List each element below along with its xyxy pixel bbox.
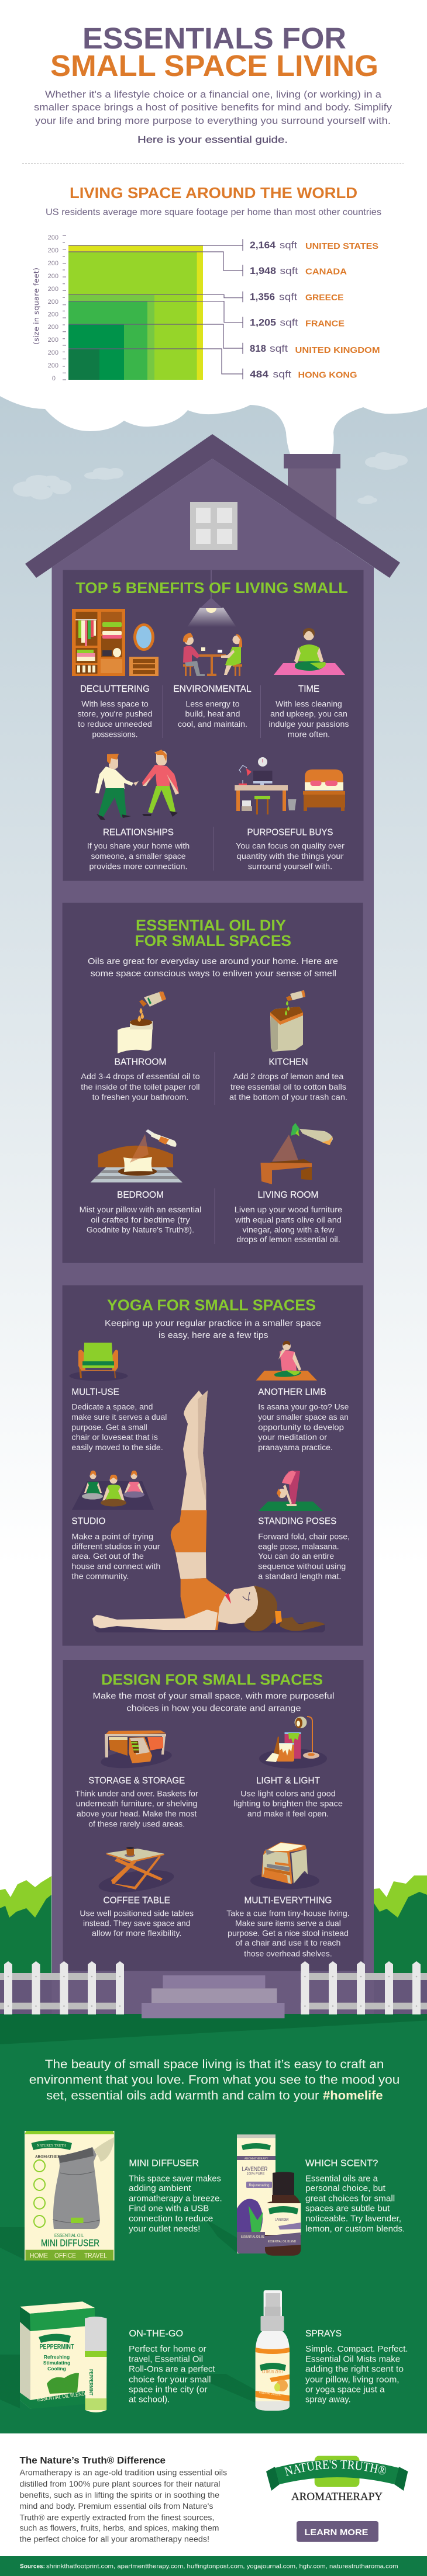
text: multi-use: MULTI-USE xyxy=(71,1388,119,1398)
text: bedroom and living room: LIVING ROOM xyxy=(257,1190,318,1200)
y axis labels: 200 xyxy=(48,247,58,254)
product: peppermint roll-on: PEPPERMINT xyxy=(40,2343,74,2351)
learn more button xyxy=(297,2521,378,2542)
illustration: shoulder stand woman xyxy=(92,1391,325,1632)
text: sprays: SPRAYS xyxy=(305,2329,342,2339)
icon: couple at table xyxy=(183,633,242,676)
text: mini diffuser: your outlet needs! xyxy=(129,2224,200,2234)
text: storage and light: of these rarely used areas. xyxy=(88,1819,185,1828)
product: mini diffuser box: OFFICE xyxy=(54,2253,76,2260)
y axis labels: 200 xyxy=(48,234,58,241)
product: peppermint roll-on xyxy=(20,2301,106,2412)
text: another limb: your smaller space as an xyxy=(258,1413,349,1422)
closing statement: environment that you love. From what you see to the mood you xyxy=(29,2074,400,2087)
text: declutter / environmental / time: indulge your passions xyxy=(269,720,349,729)
value labels: 1,205 xyxy=(250,318,276,328)
small clouds xyxy=(13,452,408,504)
value labels xyxy=(250,240,380,380)
value labels: sqft xyxy=(279,292,297,303)
text: which scent: personal choice, but xyxy=(305,2183,386,2193)
face xyxy=(218,1586,260,1624)
title xyxy=(50,22,378,82)
intro text: smaller space brings a host of positive benefits for mind and body. Simplify xyxy=(34,102,392,113)
icon: two men greeting xyxy=(95,750,179,820)
text: coffee table and multi-everything: of a chair and use it to reach xyxy=(235,1939,340,1947)
icon: forward fold xyxy=(259,1471,323,1511)
text: declutter / environmental / time: and upkeep, you can xyxy=(270,710,347,719)
value labels: UNITED STATES xyxy=(305,241,378,251)
product: lavender oil: Rejuvenating xyxy=(249,2184,270,2187)
value labels: UNITED KINGDOM xyxy=(295,345,380,355)
product: citrus spray: CITRUS ZEST xyxy=(262,2369,283,2374)
text: standing poses xyxy=(258,1516,350,1581)
product: citrus spray xyxy=(256,2290,290,2411)
text: multi-use: easily moved to the side. xyxy=(71,1443,163,1452)
text: bathroom and kitchen: tree essential oil to cotton balls xyxy=(230,1083,346,1091)
nature's truth difference: distilled from 100% pure plant sources for their natural xyxy=(20,2480,220,2488)
text: coffee table and multi-everything: Take a cue from tiny-house living. xyxy=(226,1909,350,1918)
text: sprays: spray away. xyxy=(305,2395,351,2405)
chart: living space by country xyxy=(32,234,380,382)
y axis labels: 0 xyxy=(52,375,56,382)
text: sprays: your pillow, living room, xyxy=(305,2374,400,2384)
panel: top 5 benefits xyxy=(63,570,364,881)
white picket fence xyxy=(0,1961,427,2015)
intro: Make the most of your small space, with more purposeful xyxy=(92,1691,335,1701)
y axis labels: 200 xyxy=(48,311,58,318)
text: relationships / purposeful buys: RELATIONSHIPS xyxy=(103,827,174,837)
text: declutter / environmental / time: Less energy to xyxy=(186,699,240,708)
product: peppermint roll-on: PEPPERMINT xyxy=(88,2369,94,2395)
product: lavender oil: AROMATHERAPY xyxy=(244,2158,268,2161)
text: relationships / purposeful buys: If you share your home with xyxy=(87,842,190,851)
text: storage and light: LIGHT & LIGHT xyxy=(256,1776,321,1786)
icon: trash can with oil xyxy=(270,990,305,1052)
value labels: 484 xyxy=(250,369,269,380)
text: bedroom and living room: Liven up your wood furniture xyxy=(235,1205,342,1214)
product: mini diffuser box: MINI DIFFUSER xyxy=(41,2237,99,2248)
text: studio: house and connect with xyxy=(71,1562,160,1570)
text: which scent: lemon, or custom blends. xyxy=(305,2224,405,2234)
text: standing poses: sequence without using xyxy=(258,1562,346,1570)
product: mini diffuser box: TRAVEL xyxy=(84,2253,108,2260)
leader lines xyxy=(68,239,243,379)
text: coffee table and multi-everything: purpose. Get a nice stool instead xyxy=(228,1929,349,1937)
heading: TOP 5 BENEFITS OF LIVING SMALL xyxy=(75,579,348,597)
title: ESSENTIALS FOR xyxy=(82,22,346,55)
text: bathroom and kitchen: KITCHEN xyxy=(269,1058,308,1067)
value labels: 2,164 xyxy=(250,240,276,251)
house wall xyxy=(51,459,374,2015)
intro xyxy=(88,956,338,979)
text: bathroom and kitchen: Add 2 drops of lemon and tea xyxy=(233,1072,344,1081)
text: bathroom and kitchen: to freshen your bathroom. xyxy=(92,1093,188,1101)
text: mini diffuser: adding ambient xyxy=(129,2183,191,2193)
intro text xyxy=(34,89,392,145)
text: which scent: great choices for small xyxy=(305,2193,395,2203)
front steps xyxy=(151,1975,277,2003)
y axis labels: 200 xyxy=(48,260,58,267)
leg xyxy=(181,1391,208,1511)
product: lavender oil: 100% PURE xyxy=(247,2172,265,2176)
text: another limb xyxy=(258,1388,349,1452)
text: multi-use: purpose. Get a small xyxy=(71,1423,147,1431)
text: relationships / purposeful buys: provides more connection. xyxy=(89,862,187,871)
brand banner: NATURE'S TRUTH xyxy=(37,2144,66,2148)
product: peppermint roll-on: Stimulating xyxy=(43,2360,70,2366)
chimney xyxy=(284,454,340,567)
text: another limb: pranayama practice. xyxy=(258,1443,333,1452)
intro: choices in how you decorate and arrange xyxy=(126,1704,301,1714)
text: standing poses: a standard length mat. xyxy=(258,1572,341,1581)
title: SMALL SPACE LIVING xyxy=(50,49,378,82)
text: bedroom and living room: Mist your pillow with an essential xyxy=(80,1205,201,1214)
text: studio xyxy=(71,1516,160,1581)
icon: storage bench xyxy=(100,1731,173,1771)
product: peppermint roll-on: ESSENTIAL OIL BLEND xyxy=(37,2391,85,2403)
text: relationships / purposeful buys: surround yourself with. xyxy=(248,862,332,871)
arm xyxy=(92,1610,218,1630)
text: bathroom and kitchen xyxy=(81,1052,347,1244)
text: sprays xyxy=(305,2329,408,2405)
heading xyxy=(135,917,291,949)
brand banner xyxy=(32,2140,72,2159)
y axis labels: 200 xyxy=(48,299,58,306)
text: sprays: Simple. Compact. Perfect. xyxy=(305,2344,408,2354)
sky with cloud edge xyxy=(0,396,427,2016)
text: which scent: noticeable. Try lavender, xyxy=(305,2214,401,2224)
text: storage and light: and make it feel open. xyxy=(247,1809,329,1818)
value labels: sqft xyxy=(273,369,291,380)
text: studio: STUDIO xyxy=(71,1516,105,1526)
intro text: Whether it's a lifestyle choice or a financial one, living (or working) in a xyxy=(45,89,382,100)
text: bedroom and living room: drops of lemon essential oil. xyxy=(236,1235,340,1244)
house xyxy=(25,434,400,2015)
text: bedroom and living room xyxy=(80,1190,342,1244)
intro: Keeping up your regular practice in a smaller space xyxy=(105,1318,321,1328)
text: relationships / purposeful buys: quantity with the things your xyxy=(236,852,344,861)
text: mini diffuser: Find one with a USB xyxy=(129,2204,209,2214)
torso xyxy=(175,1552,206,1579)
value labels: FRANCE xyxy=(305,319,345,328)
icon: wardrobe and dresser xyxy=(72,609,159,676)
text: bedroom and living room: BEDROOM xyxy=(117,1190,164,1200)
text: coffee table and multi-everything: MULTI-EVERYTHING xyxy=(245,1895,332,1905)
text: studio: area. Get out of the xyxy=(71,1552,144,1561)
text: standing poses: STANDING POSES xyxy=(258,1516,336,1526)
text: studio: different studios in your xyxy=(71,1542,160,1551)
lawn and green section xyxy=(0,2014,427,2433)
intro xyxy=(92,1691,335,1714)
footer: sources xyxy=(0,2556,427,2576)
intro: some space conscious ways to enliven your sense of smell xyxy=(91,969,336,979)
text: bedroom and living room: with equal parts olive oil and xyxy=(235,1215,342,1224)
text: relationships / purposeful buys: PURPOSEFUL BUYS xyxy=(247,827,333,837)
text: declutter / environmental / time: TIME xyxy=(298,684,319,694)
text: bathroom and kitchen: the inside of the toilet paper roll xyxy=(81,1083,200,1091)
heading: YOGA FOR SMALL SPACES xyxy=(107,1296,316,1314)
icon: ceiling lamp xyxy=(187,570,236,627)
closing statement: set, essential oils add warmth and calm to your xyxy=(46,2089,319,2102)
text: on-the-go: Roll-Ons are a perfect xyxy=(129,2364,215,2374)
y axis labels: 200 xyxy=(48,286,58,293)
text: mini diffuser xyxy=(129,2159,222,2234)
intro text: Here is your essential guide. xyxy=(137,134,288,145)
nested area bars xyxy=(68,245,203,380)
text: on-the-go: choice for your small xyxy=(129,2374,211,2384)
learn more button: LEARN MORE xyxy=(304,2528,369,2537)
top xyxy=(181,1578,226,1630)
text: declutter / environmental / time: ENVIRONMENTAL xyxy=(173,684,252,694)
value labels: sqft xyxy=(270,344,288,354)
icon: folding coffee table xyxy=(97,1847,175,1897)
product: mini diffuser box: HOME xyxy=(30,2253,48,2260)
text: on-the-go: at school). xyxy=(129,2395,170,2405)
text: coffee table and multi-everything: Use well positioned side tables xyxy=(80,1909,194,1918)
intro: Oils are great for everyday use around your home. Here are xyxy=(88,956,338,966)
roof xyxy=(25,434,400,578)
text: storage and light: underneath furniture, or shelving xyxy=(76,1800,198,1808)
shorts xyxy=(171,1510,207,1552)
text: mini diffuser: This space saver makes xyxy=(129,2174,221,2184)
y axis labels xyxy=(32,234,66,382)
text: standing poses: You can do an entire xyxy=(258,1552,334,1561)
text: declutter / environmental / time: to reduce unneeded xyxy=(78,720,152,729)
product: lavender oil: ESSENTIAL OIL BL xyxy=(241,2235,264,2239)
text: coffee table and multi-everything: allow for more flexibility. xyxy=(92,1929,181,1937)
text: declutter / environmental / time: store, you're pushed xyxy=(77,710,152,719)
closing statement: The beauty of small space living is that it’s easy to craft an xyxy=(45,2058,384,2071)
y axis labels: 200 xyxy=(48,362,58,369)
text: coffee table and multi-everything: COFFEE TABLE xyxy=(103,1895,170,1905)
text: coffee table and multi-everything: instead. They save space and xyxy=(83,1919,190,1928)
icon: yoga class xyxy=(72,1471,154,1510)
product: mini diffuser box xyxy=(25,2131,115,2260)
low wall behind fence xyxy=(0,1973,427,2015)
text: bathroom and kitchen: at the bottom of your trash can. xyxy=(229,1093,347,1101)
icon: desk and bed xyxy=(235,757,345,814)
icon: table with spray xyxy=(261,1123,333,1184)
mat xyxy=(95,1623,325,1632)
text: storage and light: above your head. Make the most xyxy=(77,1809,197,1818)
text: relationships / purposeful buys: You can focus on quality over xyxy=(236,842,345,851)
text: multi-use: make sure it serves a dual xyxy=(71,1413,167,1422)
text: declutter / environmental / time: build, heat and xyxy=(185,710,240,719)
product: lavender oil: LAVENDER xyxy=(275,2217,289,2222)
text: on-the-go: ON-THE-GO xyxy=(129,2329,183,2339)
text: storage and light xyxy=(75,1776,343,1828)
text: declutter / environmental / time: cool, and maintain. xyxy=(178,720,247,729)
y axis labels: (size in square feet) xyxy=(32,268,40,345)
closing statement: #homelife xyxy=(323,2089,383,2102)
nature's truth difference: the perfect choice for all your aromatherapy needs! xyxy=(20,2535,209,2544)
text: coffee table and multi-everything: those overhead shelves. xyxy=(244,1949,332,1958)
text: standing poses: eagle pose, malasana. xyxy=(258,1542,339,1551)
brand logo xyxy=(266,2456,408,2503)
text: studio: Make a point of trying xyxy=(71,1532,153,1541)
text: bathroom and kitchen: Add 3-4 drops of essential oil to xyxy=(81,1072,200,1081)
text: bathroom and kitchen: BATHROOM xyxy=(115,1058,166,1067)
intro xyxy=(105,1318,321,1340)
heading: ESSENTIAL OIL DIY xyxy=(136,917,286,934)
text: declutter / environmental / time xyxy=(77,684,349,871)
value labels: sqft xyxy=(280,266,298,276)
text: which scent xyxy=(305,2159,405,2234)
hair xyxy=(245,1586,277,1631)
intro: is easy, here are a few tips xyxy=(159,1330,268,1340)
y axis labels: 200 xyxy=(48,324,58,331)
y axis labels: 200 xyxy=(48,337,58,344)
value labels: sqft xyxy=(280,240,297,251)
icon: meditating woman on mat xyxy=(274,628,345,675)
text: declutter / environmental / time: DECLUTTERING xyxy=(80,684,150,694)
text: on-the-go xyxy=(129,2329,215,2405)
nature's truth difference: Truth® are expertly extracted from the finest sources, xyxy=(20,2513,214,2522)
value labels: 818 xyxy=(250,344,266,354)
text: multi-use: Dedicate a space, and xyxy=(71,1403,153,1412)
text: multi-use: chair or loveseat that is xyxy=(71,1433,158,1442)
text: relationships / purposeful buys xyxy=(87,827,345,871)
text: declutter / environmental / time: possessions. xyxy=(92,730,138,739)
heading: living space around the world xyxy=(46,184,381,217)
nature's truth difference: benefits, such as in lifting the spirits or in soothing the xyxy=(20,2491,219,2499)
text: studio: the community. xyxy=(71,1572,129,1581)
heading: FOR SMALL SPACES xyxy=(135,932,291,949)
text: relationships / purposeful buys: someone, a smaller space xyxy=(91,852,186,861)
text: on-the-go: space in the city (or xyxy=(129,2384,207,2394)
product: citrus spray: ESSENTIAL OIL BLEND xyxy=(259,2391,281,2397)
product: lavender oil: LAVENDER xyxy=(242,2166,268,2173)
y axis labels: 200 xyxy=(48,273,58,280)
value labels: CANADA xyxy=(305,266,347,277)
nature's truth difference xyxy=(20,2455,227,2544)
text: declutter / environmental / time: With less space to xyxy=(81,699,149,708)
product: peppermint roll-on: Cooling xyxy=(47,2366,66,2372)
text: sprays: adding the right scent to xyxy=(305,2364,404,2374)
bushes xyxy=(0,1875,427,2016)
product: peppermint roll-on: Refreshing xyxy=(44,2354,70,2360)
text: standing poses: Forward fold, chair pose, xyxy=(258,1532,350,1541)
attic window xyxy=(190,502,237,550)
intro text: your life and bring more purpose to everything you surround yourself with. xyxy=(35,116,391,126)
nature's truth difference: mind and body. Premium essential oils from Nature's xyxy=(20,2502,214,2511)
footer: sources: Sources: xyxy=(20,2563,45,2570)
closing statement xyxy=(29,2058,400,2102)
text: bedroom and living room: oil crafted for bedtime (try xyxy=(91,1215,190,1224)
heading: DESIGN FOR SMALL SPACES xyxy=(101,1670,323,1688)
nature's truth difference: Aromatherapy is an age-old tradition using essential oils xyxy=(20,2468,227,2477)
text: storage and light: STORAGE & STORAGE xyxy=(88,1776,185,1786)
text: mini diffuser: aromatherapy a breeze. xyxy=(129,2193,222,2203)
text: another limb: your meditation or xyxy=(258,1433,328,1442)
panel: essential oil DIY xyxy=(63,903,363,1263)
y axis labels: 200 xyxy=(48,349,58,356)
heading: living space around the world: US residents average more square footage per home than most other countries xyxy=(46,207,381,217)
text: coffee table and multi-everything: Make sure items serve a dual xyxy=(235,1919,341,1928)
text: storage and light: Think under and over. Baskets for xyxy=(75,1789,198,1798)
text: multi-use xyxy=(71,1388,167,1452)
text: which scent: spaces are subtle but xyxy=(305,2204,390,2214)
panel: design for small spaces xyxy=(63,1660,364,1971)
brand logo: AROMATHERAPY xyxy=(291,2491,383,2503)
text: declutter / environmental / time: more often. xyxy=(288,730,330,739)
value labels: 1,948 xyxy=(250,266,276,276)
text: bedroom and living room: vinegar, along with a few xyxy=(243,1226,335,1235)
text: storage and light: lighting to brighten the space xyxy=(233,1800,343,1808)
text: another limb: ANOTHER LIMB xyxy=(258,1388,326,1398)
heading: living space around the world: LIVING SPACE AROUND THE WORLD xyxy=(70,184,357,202)
text: bedroom and living room: Goodnite by Nature's Truth®). xyxy=(87,1226,194,1235)
text: storage and light: Use light colors and good xyxy=(240,1789,336,1798)
text: another limb: Is asana your go-to? Use xyxy=(258,1403,349,1412)
text: mini diffuser: connection to reduce xyxy=(129,2214,213,2224)
icon: step stool xyxy=(250,1842,319,1889)
text: another limb: opportunity to develop xyxy=(258,1423,344,1431)
nature's truth difference: The Nature’s Truth® Difference xyxy=(20,2455,166,2466)
text: on-the-go: travel, Essential Oil xyxy=(129,2354,203,2364)
product: lavender oil: ESSENTIAL OIL BLEND xyxy=(268,2240,296,2244)
text: which scent: WHICH SCENT? xyxy=(305,2159,378,2169)
value labels: 1,356 xyxy=(250,292,275,303)
text: on-the-go: Perfect for home or xyxy=(129,2344,206,2354)
icon: toilet roll with oil xyxy=(118,991,166,1053)
text: coffee table and multi-everything xyxy=(80,1895,350,1958)
text: sprays: Essential Oil Mists make xyxy=(305,2354,400,2364)
product: mini diffuser box: ESSENTIAL OIL xyxy=(54,2233,84,2238)
text: declutter / environmental / time: With less cleaning xyxy=(276,699,342,708)
footer: sources: shrinkthatfootprint.com, apartmenttherapy.com, huffingtonpost.com, yogajournal.com, hgtv.com, naturestrutharoma.com xyxy=(46,2563,398,2570)
brand banner: AROMATHERAPY xyxy=(35,2155,68,2159)
icon: bed with pillow mist xyxy=(91,1129,182,1183)
text: which scent: Essential oils are a xyxy=(305,2174,378,2184)
product: lavender oil xyxy=(237,2134,301,2256)
value labels: HONG KONG xyxy=(298,370,357,380)
icon: armchair xyxy=(69,1343,128,1381)
icon: paint cans and lamp xyxy=(259,1717,327,1769)
value labels: GREECE xyxy=(305,293,344,303)
value labels: sqft xyxy=(280,318,298,328)
brand logo: NATURE'S TRUTH® xyxy=(284,2460,386,2476)
text: mini diffuser: MINI DIFFUSER xyxy=(129,2159,199,2169)
icon: seated man breathing xyxy=(256,1341,317,1381)
nature's truth difference: such as flowers, fruits, herbs, and spices, making them xyxy=(20,2524,219,2533)
panel: yoga for small spaces xyxy=(63,1285,363,1646)
text: sprays: or yoga space just a xyxy=(305,2384,385,2394)
bottom step xyxy=(142,2003,284,2018)
